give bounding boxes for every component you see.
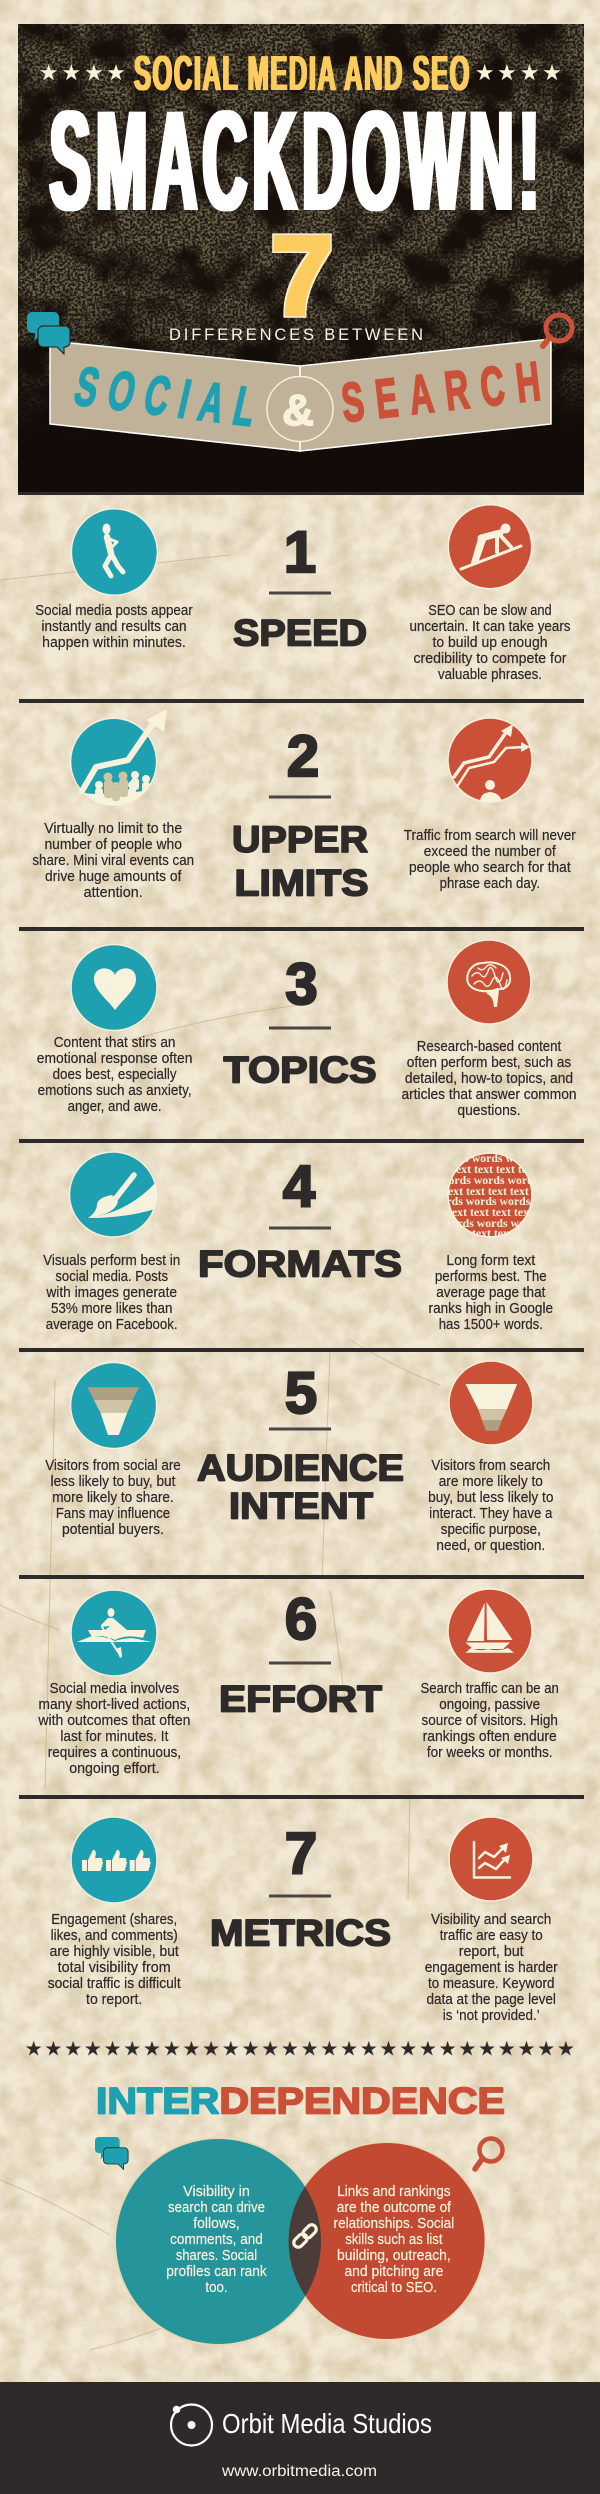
icon: viral arrow and crowd [70,709,167,810]
left text: happen within minutes. [42,635,186,651]
icon: search trend [448,718,532,806]
icon: search funnel [449,1361,533,1445]
url: www.orbitmedia.com [221,2463,377,2480]
right text [402,1039,577,1119]
left text: emotional response often [37,1051,192,1067]
section 2: upper limits [32,709,576,904]
right text [410,603,570,683]
icon: words and text pattern: text text text text [444,1184,529,1198]
icon: chain link [292,2223,318,2249]
right text: report, but [459,1944,524,1960]
right text [425,1912,558,2024]
right text: exceed the number of [424,844,556,860]
section 1: speed [35,505,570,683]
heading: upper limits: LIMITS [234,862,368,904]
icon: speech bubbles [27,312,70,354]
left text: Social media involves [50,1681,179,1697]
brand name: Orbit Media Studios [222,2408,432,2439]
icon: runner [71,509,157,595]
right text: Long form text [446,1253,535,1269]
right text: to build up enough [432,635,548,651]
icon: words and text pattern: words words words [438,1151,537,1165]
icon: thumbs up [71,1817,157,1903]
heading: upper limits [232,819,368,904]
right text: articles that answer common [402,1087,577,1103]
icon: brain [447,940,531,1024]
right venn text: are the outcome of [337,2200,451,2216]
icon: magnifier [475,2138,502,2169]
right text: Visitors from search [431,1458,550,1474]
left text: many short-lived actions, [39,1697,190,1713]
right text: valuable phrases. [438,667,542,683]
left text: requires a continuous, [48,1745,181,1761]
right text: uncertain. It can take years [410,619,570,635]
right text [429,1253,553,1333]
right text: to measure. Keyword [428,1976,554,1992]
left text: does best, especially [53,1067,177,1083]
left venn text: search can drive [168,2200,265,2216]
number 1: 1 [284,520,316,585]
left text: are highly visible, but [50,1944,179,1960]
icon: words and text pattern: text text text text [450,1226,535,1240]
left text: share. Mini viral events can [32,853,194,869]
footer [0,2382,600,2494]
left text [45,1458,181,1538]
heading: metrics: METRICS [210,1912,391,1954]
right text: has 1500+ words. [439,1317,543,1333]
banner word: search: SEARCH [338,350,543,434]
icon: rowing [71,1590,157,1676]
right text: Research-based content [417,1039,561,1055]
icon: social funnel [71,1362,157,1448]
right text: rankings often endure [423,1729,557,1745]
big number 7: 7 [271,213,333,338]
left text: with outcomes that often [37,1713,190,1729]
icon: words and text pattern: words words words [432,1194,531,1208]
heading: speed: SPEED [233,612,367,654]
left text: emotions such as anxiety, [38,1083,192,1099]
left text: likes, and comments) [51,1928,178,1944]
number 3: 3 [285,952,318,1017]
venn diagram [114,2137,487,2346]
right text: engagement is harder [425,1960,558,1976]
icon: words and text pattern: words words words [440,1173,539,1187]
icon: speech bubbles [95,2137,128,2169]
right text: interact. They have a [429,1506,552,1522]
left venn text [166,2184,268,2296]
right text: source of visitors. High [422,1713,558,1729]
header panel [18,24,584,495]
left text: Engagement (shares, [51,1912,177,1928]
right text: Search traffic can be an [421,1681,559,1697]
left text: anger, and awe. [68,1099,162,1115]
section 4: formats [43,1151,553,1333]
right venn text: relationships. Social [334,2216,454,2232]
icon: sailboat [448,1589,532,1673]
left text: Visitors from social are [45,1458,181,1474]
icon: climber [448,505,532,589]
left venn text: comments, and [170,2232,263,2248]
icon: heart [71,944,157,1030]
right venn text: Links and rankings [337,2184,451,2200]
right text: questions. [457,1103,521,1119]
left text: to report. [86,1992,142,2008]
left text: 53% more likes than [51,1301,172,1317]
right text: phrase each day. [440,876,540,892]
heading: interdependence: INTER DEPENDENCE [96,2080,505,2122]
left venn text: profiles can rank [166,2264,268,2280]
heading: effort: EFFORT [219,1678,382,1720]
left text: social traffic is difficult [48,1976,181,1992]
right text: Traffic from search will never [404,828,576,844]
left text [35,603,193,651]
right text: need, or question. [436,1538,545,1554]
icon: words and text pattern: text text text text [452,1162,537,1176]
left venn text: too. [205,2280,228,2296]
icon: words and text pattern: words words words [443,1216,542,1230]
right venn text: building, outreach, [337,2248,451,2264]
stars: header right [476,64,561,80]
number 5: 5 [285,1361,317,1426]
left text: drive huge amounts of [45,869,181,885]
right text: specific purpose, [441,1522,541,1538]
banner [50,339,551,451]
right text: SEO can be slow and [428,603,552,619]
left text [48,1912,181,2008]
right text: is ‘not provided.’ [443,2008,540,2024]
right venn text: and pitching are [344,2264,443,2280]
heading: formats: FORMATS [198,1244,402,1284]
left text [37,1035,192,1115]
right text [428,1458,553,1554]
left text [32,821,194,901]
icon: line chart [449,1817,533,1901]
row of stars [24,2039,576,2059]
left text: ongoing effort. [69,1761,160,1777]
subtitle: DIFFERENCES BETWEEN [169,326,423,344]
icon: paint brush [70,1152,158,1237]
number 6: 6 [285,1587,317,1652]
left text: number of people who [44,837,182,853]
section 7: metrics [48,1817,558,2024]
right venn text [334,2184,454,2296]
right text [404,828,576,892]
left venn text: Visibility in [183,2184,250,2200]
left text: Fans may influence [56,1506,170,1522]
left text [37,1681,190,1777]
banner word: social: SOCIAL [69,355,262,438]
ampersand: & [282,386,314,435]
left text: Content that stirs an [54,1035,176,1051]
heading: upper limits: UPPER [232,819,368,860]
left text: instantly and results can [42,619,187,635]
right text [421,1681,559,1761]
right text: performs best. The [435,1269,547,1285]
right text: Visibility and search [431,1912,551,1928]
heading: audience intent: INTENT [229,1486,373,1526]
stars: header left [40,64,125,80]
left text: Social media posts appear [35,603,193,619]
interdependence panel [95,2080,505,2346]
right text: average page that [436,1285,545,1301]
icon: words and text pattern: text text text text [448,1205,533,1219]
left text: more likely to share. [52,1490,174,1506]
heading: audience intent: AUDIENCE [197,1448,404,1488]
section 3: topics [37,940,577,1119]
heading: audience intent [197,1448,404,1526]
right venn text: critical to SEO. [351,2280,437,2296]
left text: less likely to buy, but [51,1474,175,1490]
right text: often perform best, such as [407,1055,571,1071]
right text: data at the page level [426,1992,556,2008]
left text: total visibility from [58,1960,171,1976]
number 4: 4 [283,1154,315,1219]
left venn text: follows, [193,2216,240,2232]
left text: last for minutes. It [60,1729,168,1745]
right text: ranks high in Google [429,1301,553,1317]
left text: social media. Posts [55,1269,168,1285]
heading: topics: TOPICS [224,1050,376,1090]
right text: detailed, how-to topics, and [405,1071,573,1087]
number 2: 2 [287,724,319,789]
right text: ongoing, passive [439,1697,540,1713]
left text: with images generate [45,1285,177,1301]
right text: traffic are easy to [440,1928,543,1944]
left text: potential buyers. [62,1522,164,1538]
section 6: effort [37,1587,559,1777]
right text: for weeks or months. [427,1745,553,1761]
left text: average on Facebook. [46,1317,178,1333]
right text: credibility to compete for [414,651,567,667]
section 5: audience intent [45,1361,553,1554]
left text: Virtually no limit to the [44,821,182,837]
icon: words and text pattern [448,1152,533,1238]
number 7: 7 [285,1821,317,1886]
left venn text: shares. Social [176,2248,257,2264]
left text: attention. [84,885,143,901]
right text: buy, but less likely to [428,1490,553,1506]
icon: orbit logo [171,2404,212,2446]
icon: magnifier [543,315,572,346]
right text: people who search for that [409,860,571,876]
right venn text: skills such as list [345,2232,443,2248]
left text: Visuals perform best in [43,1253,180,1269]
left text [43,1253,180,1333]
right text: are more likely to [439,1474,543,1490]
